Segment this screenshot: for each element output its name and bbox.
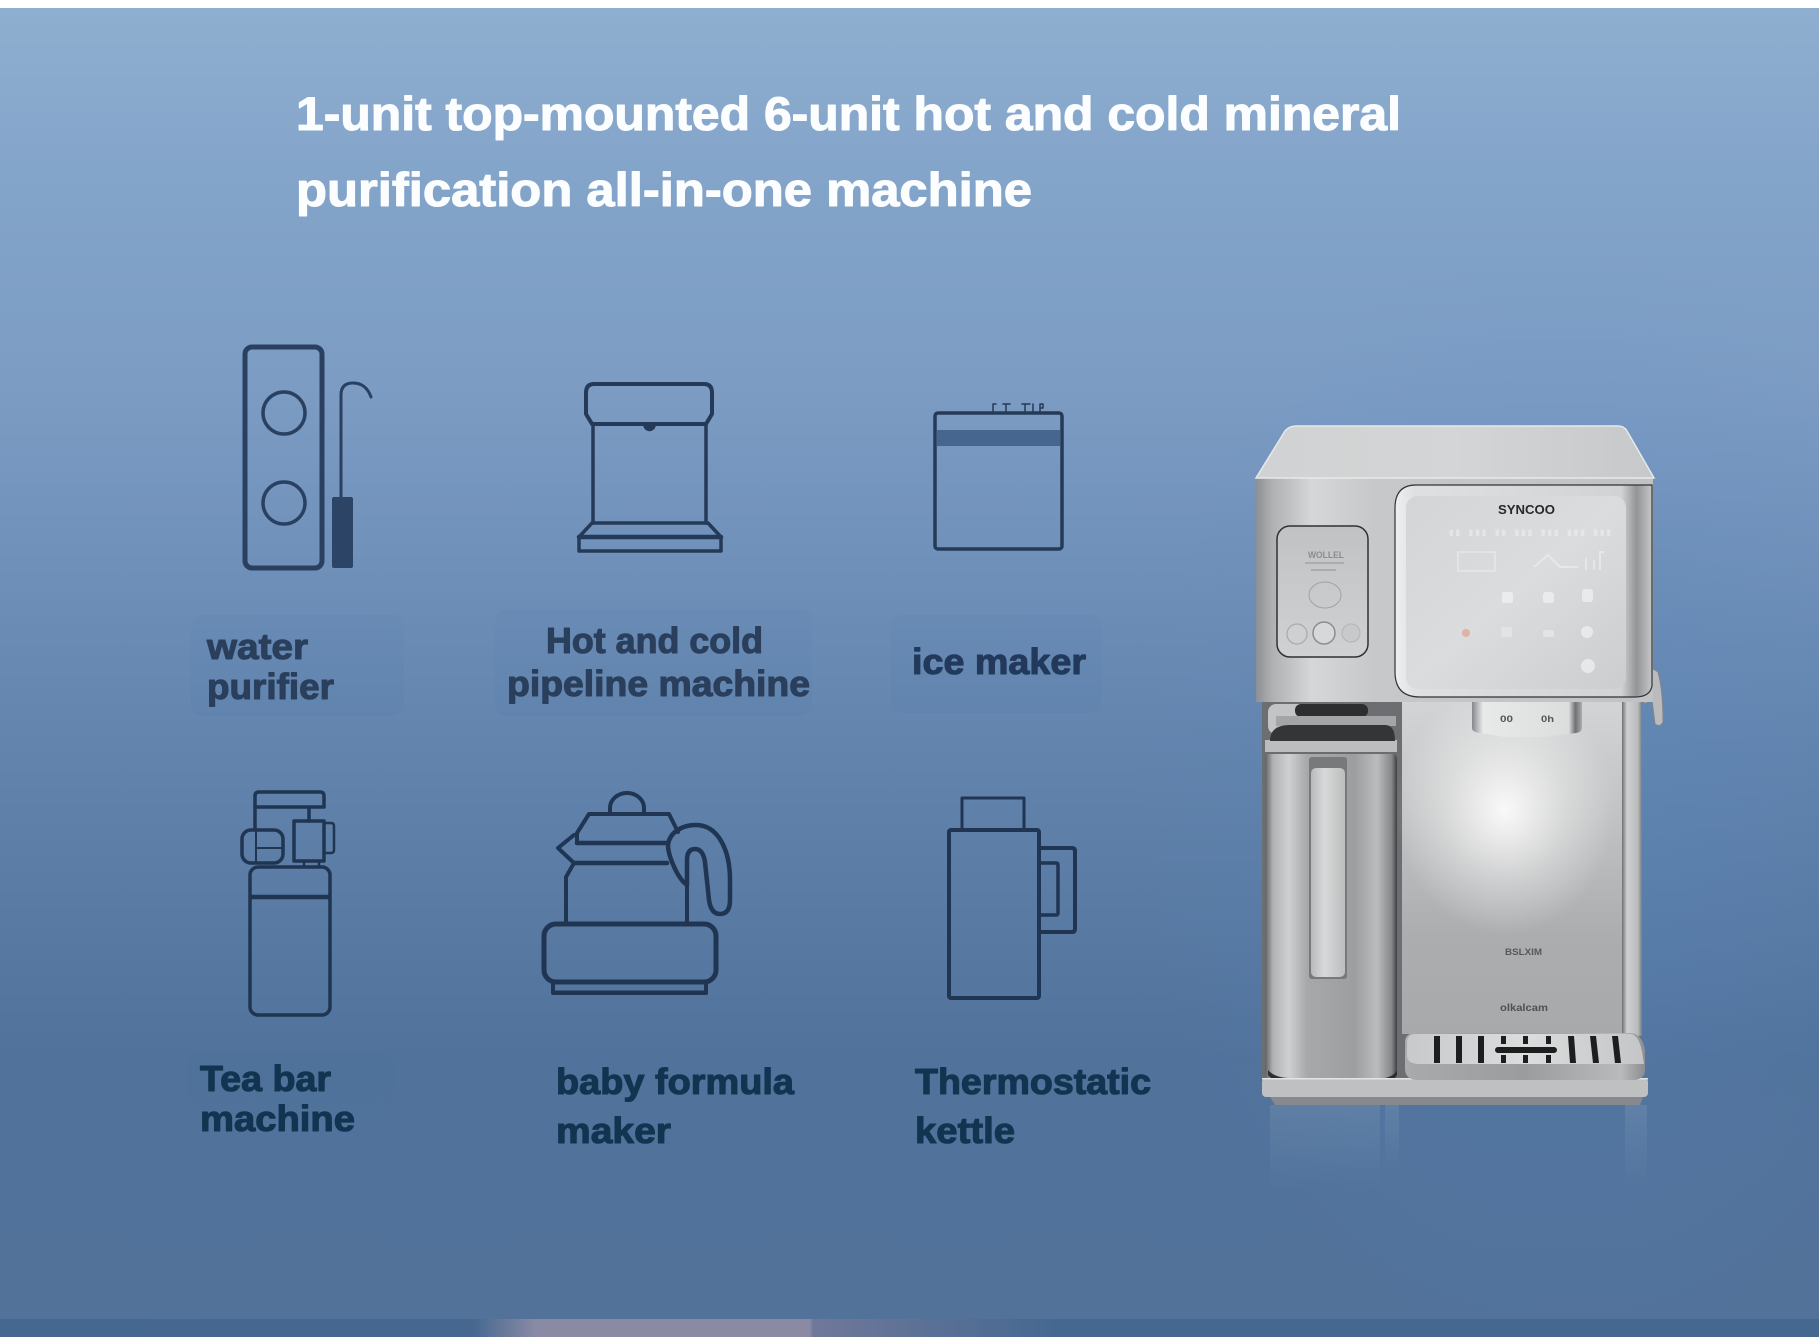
touch display panel: II III II III III III III <box>1448 528 1612 538</box>
icon: tea bar machine <box>242 792 334 1015</box>
water outlet <box>1472 702 1582 737</box>
water outlet: 0h <box>1541 714 1554 724</box>
label: thermostatic kettle: Thermostatic <box>915 1061 1151 1102</box>
icon: water purifier <box>245 347 371 568</box>
label: baby formula maker: baby formula <box>556 1061 795 1102</box>
drip tray <box>1405 1033 1645 1080</box>
label: tea bar machine: Tea bar <box>200 1058 331 1099</box>
panel: tea bar machine <box>186 792 394 1150</box>
panel: baby formula maker <box>544 793 795 1151</box>
label: hot and cold pipeline machine: Hot and cold <box>546 620 763 661</box>
label: thermostatic kettle <box>915 1061 1151 1151</box>
icon: ice maker <box>935 404 1062 549</box>
panel: ice maker <box>891 404 1102 713</box>
label: thermostatic kettle: kettle <box>915 1110 1015 1151</box>
panel: water purifier <box>191 347 404 716</box>
machine reflection <box>1270 1105 1647 1190</box>
label: hot and cold pipeline machine <box>507 620 810 704</box>
label: tea bar machine <box>200 1058 355 1139</box>
machine base <box>1262 1078 1648 1105</box>
icon: baby formula maker <box>544 793 730 993</box>
panel: thermostatic kettle <box>915 798 1151 1151</box>
title <box>296 87 1401 216</box>
touch display panel <box>1395 485 1652 697</box>
label: water purifier: purifier <box>207 666 334 707</box>
label: tea bar machine: machine <box>200 1098 355 1139</box>
small control panel <box>1277 526 1368 657</box>
panel: hot and cold pipeline machine <box>495 384 812 716</box>
label: baby formula maker: maker <box>556 1110 671 1151</box>
kettle <box>1265 704 1397 1081</box>
upper body <box>1256 478 1653 702</box>
lower back panel <box>1262 685 1642 1080</box>
title: 1-unit top-mounted 6-unit hot and cold mineral <box>296 87 1401 140</box>
product: water dispenser machine <box>1256 426 1663 1190</box>
label: hot and cold pipeline machine: pipeline machine <box>507 663 810 704</box>
icon: hot and cold pipeline machine <box>579 384 721 551</box>
label: water purifier: water <box>206 626 308 667</box>
label: water purifier <box>206 626 334 707</box>
label: baby formula maker <box>556 1061 795 1151</box>
label: ice maker: ice maker <box>912 641 1086 682</box>
lower back panel: olkalcam <box>1500 1003 1548 1014</box>
lower back panel: BSLXIM <box>1505 947 1542 957</box>
side water spigot <box>1644 667 1663 726</box>
icon: thermostatic kettle <box>949 798 1075 998</box>
small control panel: WOLLEL <box>1308 550 1344 560</box>
title: purification all-in-one machine <box>296 163 1032 216</box>
touch display panel: SYNCOO <box>1498 502 1555 517</box>
top lid <box>1256 426 1654 478</box>
water outlet: 00 <box>1500 714 1513 724</box>
